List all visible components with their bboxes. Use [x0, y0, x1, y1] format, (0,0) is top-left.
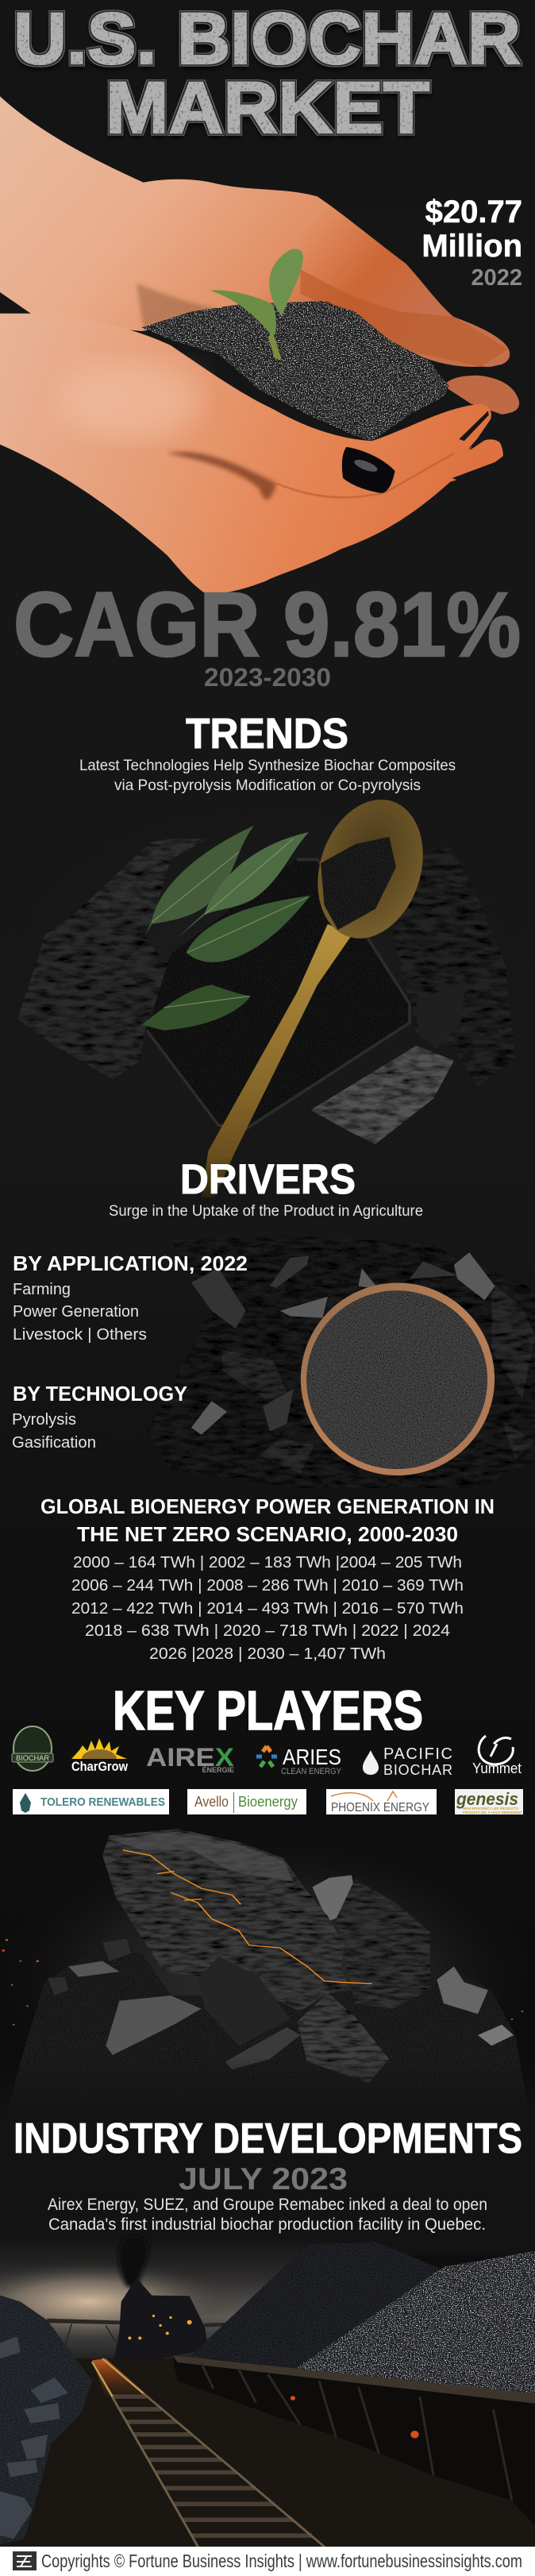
lava cracks [123, 1850, 372, 1984]
horizon glow [0, 2261, 236, 2343]
title: MARKET [106, 67, 429, 148]
soil mound [141, 301, 448, 441]
logo: yummet [472, 1736, 522, 1776]
logo: phoenix energy [326, 1789, 437, 1814]
developments description: Airex Energy, SUEZ, and Groupe Remabec inked a deal to open [48, 2196, 487, 2214]
bioenergy heading: THE NET ZERO SCENARIO, 2000-2030 [77, 1522, 458, 1546]
logo: pacific biochar: PACIFIC [383, 1745, 452, 1763]
logo: chargrow [71, 1738, 129, 1774]
bridge [48, 2319, 227, 2346]
bioenergy data list [71, 1554, 464, 1663]
foreground rocks [48, 1938, 514, 2083]
CAGR period: 2023-2030 [204, 663, 331, 692]
bioenergy data list: 2000 – 164 TWh | 2002 – 183 TWh |2004 – 205 TWh [73, 1554, 462, 1571]
sprout [210, 249, 303, 360]
segment: by application: Farming [13, 1281, 71, 1298]
spoon bowl [298, 781, 443, 958]
palm crease shadow [167, 452, 276, 499]
trends heading: TRENDS [186, 710, 348, 758]
logo: genesis: genesis [456, 1789, 518, 1809]
debris pile [0, 1940, 535, 2141]
logo: tolero renewables: TOLERO RENEWABLES [40, 1795, 165, 1809]
logo: genesis: HIGH EFFICIENCY LED PRODUCTS [463, 1807, 518, 1811]
logo: avello bioenergy: Avello [194, 1794, 229, 1810]
segment: by application: BY APPLICATION, 2022 [13, 1251, 248, 1275]
bioenergy data list: 2026 |2028 | 2030 – 1,407 TWh [149, 1645, 386, 1663]
right rock [337, 1879, 430, 2009]
segment: by technology [12, 1382, 187, 1452]
thumb lower edge [276, 453, 454, 497]
developments date: JULY 2023 [179, 2162, 348, 2196]
upper hand [0, 96, 510, 367]
logo: chargrow: CharGrow [71, 1759, 129, 1774]
developments description: Canada's first industrial biochar production facility in Quebec. [48, 2215, 486, 2234]
bioenergy heading [40, 1494, 495, 1546]
charcoal left [17, 839, 208, 1080]
spoon handle [202, 924, 352, 1197]
drivers description: Surge in the Uptake of the Product in Agriculture [109, 1203, 423, 1220]
bioenergy heading: GLOBAL BIOENERGY POWER GENERATION IN [40, 1494, 495, 1518]
ember particles [2, 1939, 523, 2026]
bowl rim [301, 1282, 495, 1475]
segment: by application: Power Generation [13, 1303, 139, 1321]
smoke [118, 2236, 149, 2291]
bowl powder [306, 1290, 487, 1469]
leaves [141, 825, 310, 1031]
segment: by technology: Pyrolysis [12, 1411, 76, 1429]
logo: pacific biochar [363, 1745, 452, 1778]
photo: charcoal, leaves and gold spoon [0, 781, 535, 1197]
title [13, 0, 521, 148]
coal pile back [191, 2242, 444, 2370]
coal pile left [0, 2296, 92, 2545]
lower hand [0, 314, 503, 594]
tray [147, 859, 410, 1129]
logo: pacific biochar: BIOCHAR [383, 1762, 452, 1778]
logo: airex: AIRE X [146, 1743, 235, 1772]
footer logo [13, 2551, 37, 2570]
finger nails [452, 351, 524, 482]
developments description [48, 2196, 487, 2234]
logo: biochar seal [12, 1726, 53, 1771]
fade between rocks and headline [0, 2057, 535, 2120]
trends description: Latest Technologies Help Synthesize Biochar Composites [79, 758, 456, 774]
ground [0, 2358, 535, 2547]
bioenergy data list: 2018 – 638 TWh | 2020 – 718 TWh | 2022 | 2024 [85, 1622, 450, 1640]
pale rock behind [312, 1875, 355, 1922]
title: U.S. BIOCHAR [13, 0, 521, 79]
photo: hands holding soil and sprout [0, 96, 524, 594]
tray rim [147, 859, 410, 1129]
charcoal right [310, 844, 515, 1144]
logo: biochar seal: BIOCHAR [16, 1754, 50, 1762]
palm highlight [58, 361, 202, 439]
logo: phoenix energy: PHOENIX ENERGY [331, 1801, 429, 1814]
segment: by technology: BY TECHNOLOGY [13, 1382, 187, 1406]
photo: glowing charcoal rocks [0, 1823, 535, 2141]
headline backdrop [0, 2120, 535, 2255]
rail cars [172, 2355, 535, 2526]
rock top highlights [110, 1831, 294, 1882]
logo: tolero renewables [13, 1789, 169, 1814]
market size: Million [421, 229, 522, 264]
logo: aries: CLEAN ENERGY [281, 1767, 342, 1776]
logo: aries [256, 1745, 342, 1776]
second fingertip [444, 376, 519, 415]
key players heading: KEY PLAYERS [113, 1679, 423, 1741]
finger shading and dirt [300, 269, 509, 367]
charcoal shards [147, 1236, 535, 1488]
factory [114, 2278, 208, 2358]
nail highlight [353, 457, 379, 474]
market size: 2022 [471, 265, 522, 291]
logo: avello bioenergy [187, 1789, 306, 1814]
logo: aries: ARIES [283, 1745, 341, 1769]
logo: avello bioenergy: Bioenergy [238, 1794, 298, 1810]
segment: by technology: Gasification [12, 1434, 96, 1452]
logo: yummet: Yummet [472, 1760, 522, 1776]
logo: airex: ÉNERGIE [202, 1766, 234, 1774]
sky [0, 2239, 341, 2365]
main rock [102, 1829, 348, 2011]
footer [0, 2547, 535, 2576]
coal pile front [294, 2251, 535, 2395]
market size: $20.77 [425, 195, 522, 229]
segment: by application [13, 1251, 248, 1344]
spoon soil [321, 837, 396, 930]
bioenergy data list: 2012 – 422 TWh | 2014 – 493 TWh | 2016 – 570 TWh [71, 1600, 464, 1618]
logo: genesis: PRODUITS DEL À HAUT RENDEMENT [463, 1810, 522, 1814]
trends description [79, 758, 456, 794]
thumb nail [342, 447, 395, 493]
bioenergy data list: 2006 – 244 TWh | 2008 – 286 TWh | 2010 – 369 TWh [71, 1577, 464, 1595]
track [92, 2358, 324, 2547]
trends description: via Post-pyrolysis Modification or Co-pyrolysis [114, 777, 421, 794]
palm dirt shadow [137, 283, 218, 328]
drivers image: scattered charcoal and bowl [147, 1236, 535, 1488]
market size [421, 195, 522, 291]
photo: rail track and coal piles [0, 2236, 535, 2547]
segment: by application: Livestock | Others [13, 1326, 147, 1344]
drivers heading: DRIVERS [180, 1156, 356, 1203]
